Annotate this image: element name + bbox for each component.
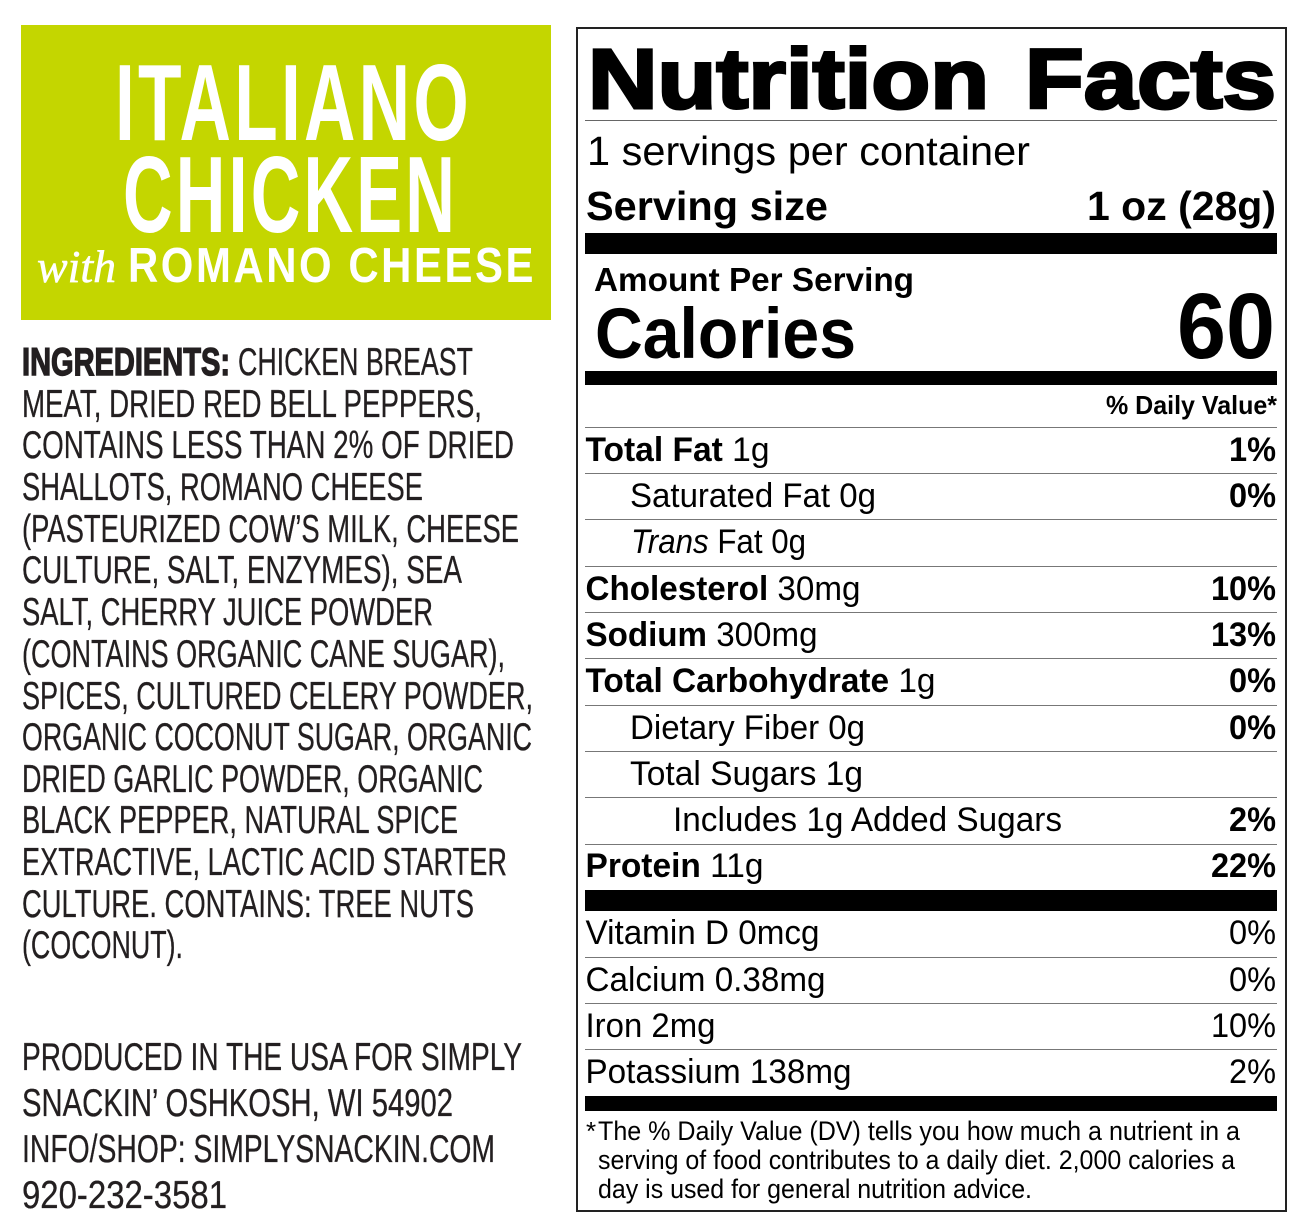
- row: added sugars: [673, 801, 1276, 839]
- text block: producer contact: PRODUCED IN THE USA FOR SIMPLY: [22, 1036, 522, 1079]
- row: total sugars: Total Sugars 1g: [630, 755, 863, 793]
- row: total fat: [586, 431, 1276, 469]
- text block: ingredients: CULTURE, SALT, ENZYMES), SEA: [22, 549, 462, 592]
- row: protein: [586, 847, 1276, 885]
- row: dietary fiber: [630, 709, 1276, 747]
- serving size: [586, 183, 1276, 229]
- subtitle: Romano Cheese: ROMANO CHEESE: [128, 239, 536, 293]
- row: iron: Iron 2mg: [586, 1007, 716, 1045]
- calories: 60: [1177, 274, 1275, 378]
- row: vitamin D: Vitamin D 0mcg: [586, 914, 820, 952]
- serving size: Serving size: [586, 183, 828, 229]
- text block: producer contact: [22, 1036, 522, 1217]
- row: total fat: 1%: [1229, 431, 1276, 469]
- row: trans fat: Trans Fat 0g: [631, 523, 806, 561]
- text block: producer contact: INFO/SHOP: SIMPLYSNACKIN.COM: [22, 1128, 495, 1171]
- text block: ingredients: CULTURE. CONTAINS: TREE NUTS: [22, 883, 474, 926]
- text block: ingredients: BLACK PEPPER, NATURAL SPICE: [22, 799, 458, 842]
- text block: ingredients: SPICES, CULTURED CELERY POWDER,: [22, 675, 533, 718]
- text block: ingredients: CONTAINS LESS THAN 2% OF DRIED: [22, 424, 514, 467]
- row: saturated fat: [630, 477, 1276, 515]
- footnote: day is used for general nutrition advice.: [598, 1174, 1032, 1204]
- title: Chicken: CHICKEN: [123, 134, 458, 256]
- row: vitamin D: 0%: [1229, 914, 1276, 952]
- text block: ingredients: SALT, CHERRY JUICE POWDER: [22, 591, 433, 634]
- heading: Nutrition Facts: Nutrition: [588, 32, 989, 126]
- row: sodium: [586, 616, 1276, 654]
- title: Italiano: ITALIANO: [115, 42, 472, 164]
- row: cholesterol: 10%: [1211, 570, 1276, 608]
- row: dietary fiber: Dietary Fiber 0g: [630, 709, 865, 747]
- text block: producer contact: 920-232-3581: [22, 1174, 227, 1217]
- row: added sugars: Includes 1g Added Sugars: [673, 801, 1062, 839]
- row: potassium: [586, 1053, 1276, 1091]
- row: iron: 10%: [1211, 1007, 1276, 1045]
- subtitle: with: with: [37, 241, 116, 292]
- row: total carbohydrate: [586, 662, 1276, 700]
- row: sodium: Sodium 300mg: [586, 616, 818, 654]
- text block: ingredients: ORGANIC COCONUT SUGAR, ORGANIC: [22, 716, 532, 759]
- text block: ingredients: (COCONUT).: [22, 924, 183, 967]
- footnote: [586, 1116, 1241, 1204]
- row: added sugars: 2%: [1229, 801, 1276, 839]
- row: saturated fat: Saturated Fat 0g: [630, 477, 876, 515]
- calories: Calories: [595, 295, 856, 374]
- row: potassium: Potassium 138mg: [586, 1053, 852, 1091]
- row: sodium: 13%: [1211, 616, 1276, 654]
- serving size: 1 oz (28g): [1087, 183, 1276, 229]
- heading: Nutrition Facts: [588, 32, 1276, 126]
- footnote: serving of food contributes to a daily diet. 2,000 calories a: [598, 1145, 1236, 1175]
- text block: ingredients: INGREDIENTS:: [22, 341, 230, 384]
- calories: [595, 274, 1275, 378]
- row: total carbohydrate: Total Carbohydrate 1g: [586, 662, 936, 700]
- row: vitamin D: [586, 914, 1276, 952]
- row: dietary fiber: 0%: [1229, 709, 1276, 747]
- text block: producer contact: SNACKIN’ OSHKOSH, WI 54902: [22, 1082, 453, 1125]
- row: cholesterol: Cholesterol 30mg: [586, 570, 860, 608]
- amount per serving: Amount Per Serving: [594, 261, 914, 298]
- row: protein: Protein 11g: [586, 847, 764, 885]
- daily value header: % Daily Value*: [1106, 390, 1278, 420]
- row: saturated fat: 0%: [1229, 477, 1276, 515]
- row: protein: 22%: [1211, 847, 1276, 885]
- text block: ingredients: MEAT, DRIED RED BELL PEPPERS,: [22, 383, 482, 426]
- text block: ingredients: DRIED GARLIC POWDER, ORGANIC: [22, 758, 483, 801]
- row: total carbohydrate: 0%: [1229, 662, 1276, 700]
- text block: ingredients: (PASTEURIZED COW’S MILK, CHEESE: [22, 508, 519, 551]
- row: potassium: 2%: [1229, 1053, 1276, 1091]
- text block: ingredients: (CONTAINS ORGANIC CANE SUGAR),: [22, 633, 505, 676]
- footnote: *: [586, 1116, 596, 1146]
- row: cholesterol: [586, 570, 1276, 608]
- row: calcium: [586, 961, 1276, 999]
- row: calcium: Calcium 0.38mg: [586, 961, 826, 999]
- text block: ingredients: EXTRACTIVE, LACTIC ACID STARTER: [22, 841, 507, 884]
- text block: ingredients: SHALLOTS, ROMANO CHEESE: [22, 466, 423, 509]
- panel: product title banner: [21, 25, 551, 320]
- text block: ingredients: CHICKEN BREAST: [238, 341, 473, 384]
- row: iron: [586, 1007, 1276, 1045]
- row: calcium: 0%: [1229, 961, 1276, 999]
- servings per container: 1 servings per container: [587, 128, 1030, 174]
- row: total fat: Total Fat 1g: [586, 431, 770, 469]
- panel: nutrition facts label: [577, 28, 1286, 1211]
- footnote: The % Daily Value (DV) tells you how much a nutrient in a: [598, 1116, 1241, 1146]
- text block: ingredients: [22, 341, 533, 967]
- heading: Nutrition Facts: Facts: [1025, 32, 1276, 126]
